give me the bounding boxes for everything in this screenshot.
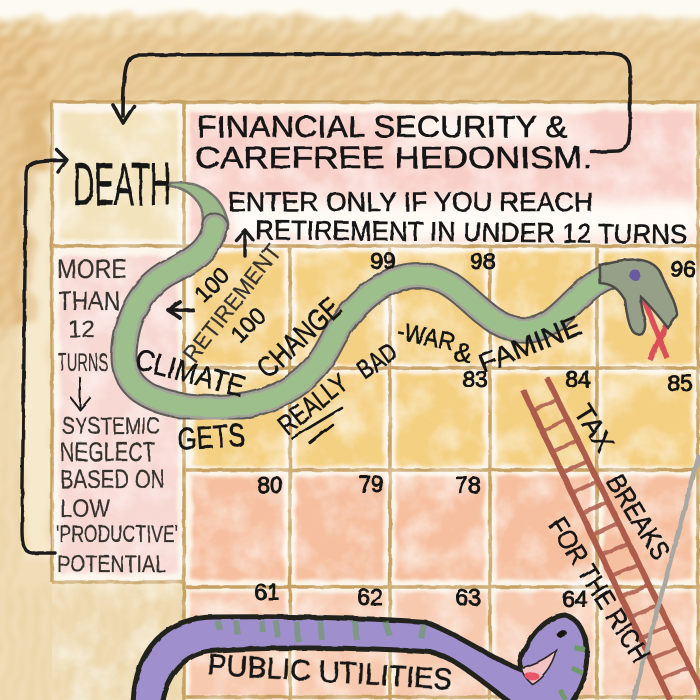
arrow: up to retirement entry <box>236 230 253 256</box>
snake caption: climate change gets really bad, war and famine: & <box>452 337 475 369</box>
purple body and head <box>133 615 587 700</box>
square numbers: 78 <box>455 472 481 498</box>
grid lines <box>52 102 700 700</box>
white wash in top panel <box>190 112 700 240</box>
heading: financial security: CAREFREE HEDONISM. <box>195 140 592 175</box>
snake caption: climate change gets really bad, war and famine: GETS <box>176 417 246 457</box>
snake tail <box>170 182 228 228</box>
ladder caption: tax breaks for the rich: FOR THE RICH <box>543 512 655 668</box>
board paper <box>52 102 700 700</box>
heading: financial security <box>195 109 592 175</box>
text: more than 12 turns: MORE <box>57 254 127 284</box>
cell: death <box>60 112 178 240</box>
purple snake eye <box>556 629 568 639</box>
snake body <box>124 226 630 408</box>
text: systemic neglect: BASED ON <box>60 464 165 494</box>
snake eye <box>630 270 640 280</box>
square numbers: 79 <box>358 471 384 497</box>
retirement square: 100 <box>225 302 271 348</box>
text: more than 12 turns: TURNS <box>58 349 108 377</box>
square numbers: 63 <box>455 584 481 610</box>
retirement square: RETIREMENT <box>178 239 286 367</box>
green snake: climate change <box>124 182 677 408</box>
square numbers: 83 <box>462 366 488 392</box>
head spots <box>560 648 585 700</box>
text: systemic neglect <box>56 413 178 578</box>
snake caption: public utilities: PUBLIC UTILITIES <box>207 649 453 696</box>
text: systemic neglect: LOW <box>60 495 110 523</box>
retirement rule: ENTER ONLY IF YOU REACH <box>228 187 593 217</box>
text: more than 12 turns: 12 <box>68 316 95 343</box>
snake caption: climate change gets really bad, war and famine: FAMINE <box>474 310 586 379</box>
back spikes <box>218 621 424 642</box>
retirement square: 100 <box>189 262 235 308</box>
square numbers: 61 <box>254 579 280 605</box>
arrow: left from retirement <box>168 302 193 318</box>
ladder: tax breaks for the rich <box>523 378 700 700</box>
arrow: neglect leads to death <box>22 150 67 553</box>
square numbers: 85 <box>667 370 693 396</box>
underlines on really <box>292 408 342 443</box>
text: systemic neglect: POTENTIAL <box>57 551 166 578</box>
snake caption: climate change gets really bad, war and famine: -WAR <box>395 317 457 357</box>
heading: financial security: FINANCIAL SECURITY & <box>197 109 567 144</box>
purple snake: public utilities <box>133 615 587 700</box>
coloured cells <box>60 112 694 698</box>
game board grid <box>52 102 700 700</box>
snake caption: climate change gets really bad, war and famine <box>132 292 586 457</box>
text: systemic neglect: SYSTEMIC <box>62 413 160 440</box>
row: 100 to 96 <box>194 252 693 364</box>
ladder caption: tax breaks for the rich: BREAKS <box>600 469 676 565</box>
ladder caption: tax breaks for the rich: TAX <box>568 399 620 457</box>
retirement rule <box>228 187 687 250</box>
grey ladder rail <box>633 455 699 700</box>
square numbers: 84 <box>565 366 591 392</box>
snake caption: climate change gets really bad, war and famine: CLIMATE <box>132 343 248 404</box>
row: 81 to 85 <box>194 374 693 466</box>
arrow: wealth loops back to death <box>113 53 630 152</box>
cell: financial security <box>190 112 694 242</box>
square numbers <box>254 248 696 612</box>
square numbers: 80 <box>257 472 283 498</box>
watercolour blotches <box>52 102 700 700</box>
row: 80 to 76 <box>192 476 693 580</box>
text: systemic neglect: 'PRODUCTIVE' <box>56 521 178 548</box>
retirement rule: RETIREMENT IN UNDER 12 TURNS <box>255 215 687 250</box>
board text: DEATH <box>73 151 171 218</box>
row: 61 to 65 <box>190 592 693 698</box>
ladder caption: tax breaks for the rich <box>543 399 676 668</box>
square numbers: 96 <box>670 256 696 282</box>
square numbers: 64 <box>562 586 588 612</box>
snake head <box>600 259 677 335</box>
snake tongue <box>643 297 667 360</box>
square numbers: 99 <box>370 248 396 274</box>
text: systemic neglect: NEGLECT <box>60 437 155 467</box>
arrows <box>22 53 630 553</box>
arrow: down to systemic neglect <box>71 378 90 410</box>
board text <box>56 109 696 696</box>
snake caption: climate change gets really bad, war and famine: CHANGE <box>251 292 348 385</box>
text: more than 12 turns: THAN <box>58 286 120 316</box>
cell: more than 12 turns <box>60 256 178 574</box>
square numbers: 62 <box>357 584 383 610</box>
mouth tongue <box>525 672 539 680</box>
text: more than 12 turns <box>57 254 127 377</box>
square numbers: 98 <box>470 248 496 274</box>
snake caption: climate change gets really bad, war and famine: BAD <box>351 337 403 385</box>
mouth <box>521 650 556 684</box>
snake caption: climate change gets really bad, war and famine: REALLY <box>272 368 354 440</box>
